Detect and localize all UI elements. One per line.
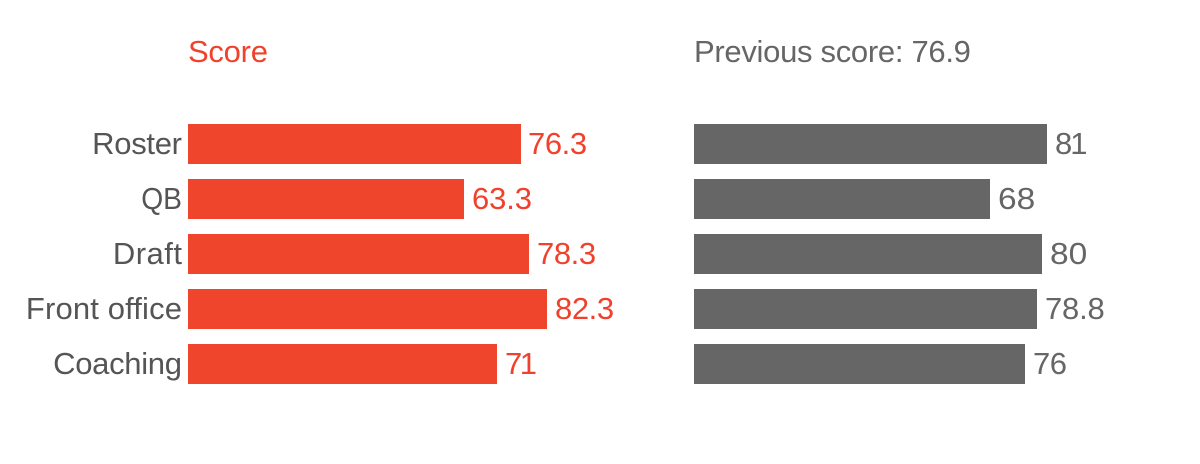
category labels [26,126,182,381]
heading: previous score: Previous score: 76.9 [694,34,971,69]
bar chart: score: 71 [505,346,534,381]
heading: score: Score [188,34,268,69]
category labels: Front office [26,291,182,326]
bar chart: previous score: 68 [998,181,1035,216]
bar chart: previous score: 80 [1050,236,1087,271]
bar chart: score: 76.3 [528,126,587,161]
category labels: Roster [92,126,182,161]
bar chart: score: 63.3 [472,181,532,216]
category labels: Draft [113,236,182,271]
bar chart: score: 82.3 [555,291,614,326]
category labels: Coaching [53,346,182,381]
bar chart: score: 78.3 [537,236,596,271]
bar chart: previous score: 81 [1055,126,1085,161]
bar chart: previous score [694,124,1105,384]
bar chart: previous score: 78.8 [1045,291,1105,326]
bar chart: previous score: 76 [1033,346,1066,381]
category labels: QB [141,181,182,216]
bar chart: score [188,124,614,384]
